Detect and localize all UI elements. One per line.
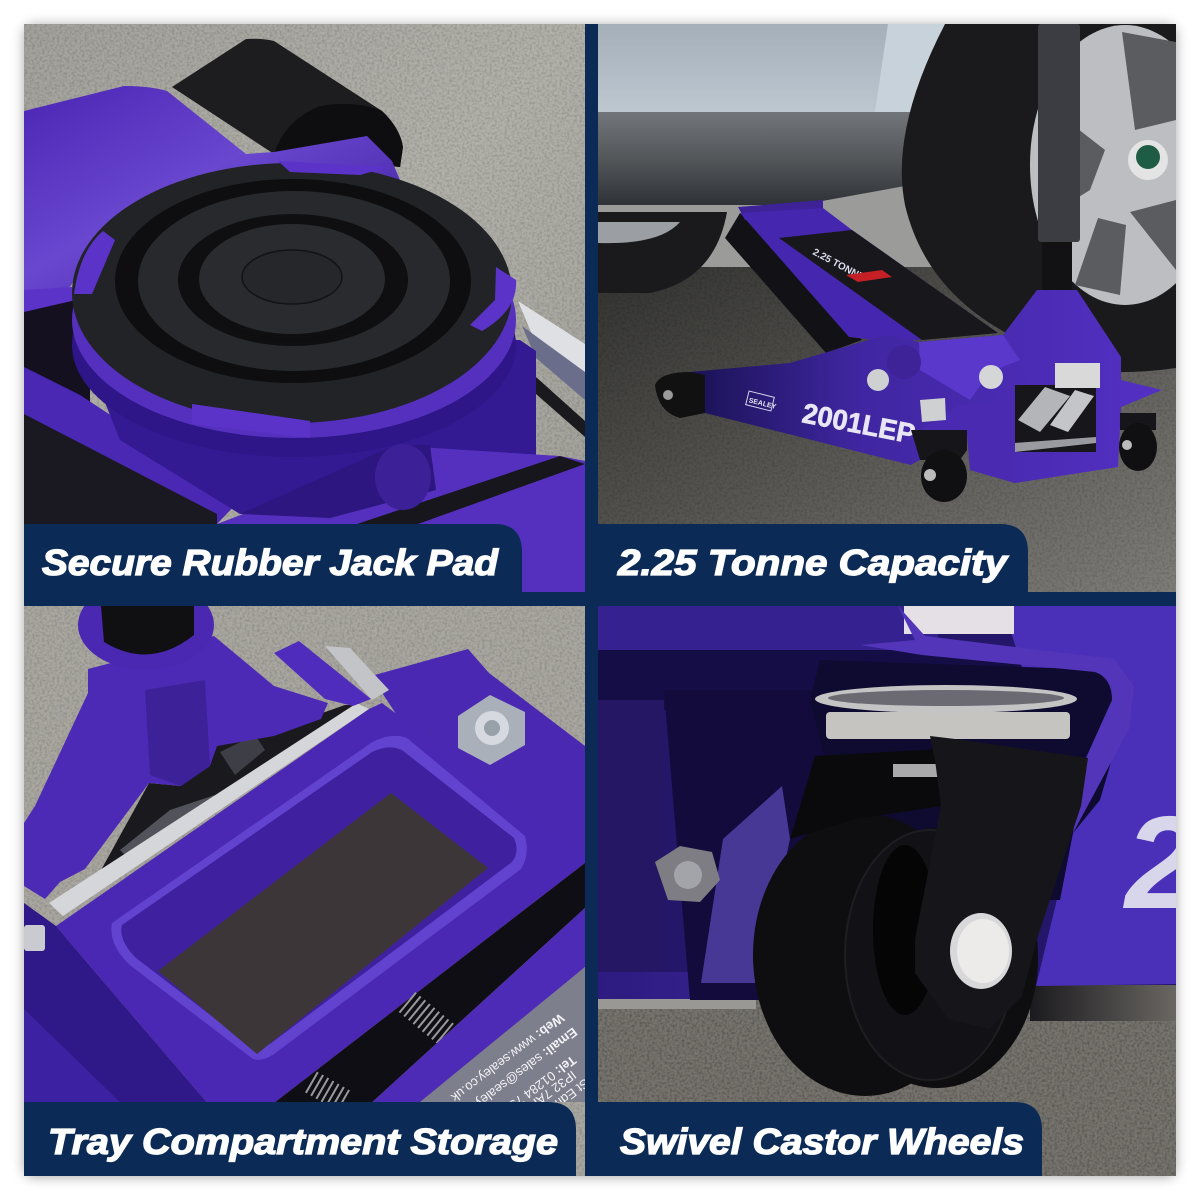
- pillar collar: [78, 606, 214, 664]
- label: secure rubber jack pad: [24, 524, 522, 592]
- icon: pillar: [24, 580, 328, 899]
- bright flange: [860, 606, 1134, 833]
- upper shell: [598, 606, 938, 650]
- chrome bolts behind flange: [325, 646, 389, 700]
- sealey badge: SEALEY: [748, 397, 777, 411]
- icon: front tyre and wheel: [902, 24, 1200, 372]
- panel: swivel castor wheels: [598, 606, 1198, 1176]
- icon: chrome bar: [49, 703, 369, 916]
- left shell: [598, 700, 664, 990]
- icon: black fork: [790, 749, 941, 839]
- label: swivel castor wheels: [585, 1102, 1042, 1176]
- mechanism cavity: [1015, 385, 1096, 452]
- sticker: IP32 7AR: [526, 1068, 579, 1113]
- right shell: [1003, 606, 1176, 986]
- jack brand lettering: 2001LEP: [800, 397, 918, 450]
- side frame: [690, 290, 1162, 483]
- shell underside: [810, 660, 1129, 900]
- label: swivel castor wheels: Swivel Castor Wheels: [620, 1121, 1024, 1162]
- purple rear body: [24, 86, 400, 295]
- icon: black roller: [172, 39, 403, 167]
- sticker: Email: sales@sealey.co.uk: [445, 1025, 580, 1132]
- icon: tray body: [24, 703, 585, 1106]
- icon: rear tyre: [598, 212, 727, 293]
- front left wheel: [655, 372, 705, 418]
- purple pad seat: [72, 332, 516, 457]
- panel: tray compartment storage: [24, 580, 592, 1176]
- panel: rubber jack pad: [24, 24, 585, 592]
- label: secure rubber jack pad: Secure Rubber Jack Pad: [42, 542, 499, 583]
- bolts: [867, 369, 889, 391]
- pivot: [887, 345, 921, 379]
- purple band: [368, 908, 585, 1106]
- wheel shadow: [1030, 985, 1176, 1021]
- icon: back plate: [371, 649, 585, 860]
- icon: shaft: [101, 606, 194, 654]
- sealey badge: [746, 391, 779, 412]
- label: capacity: 2.25 Tonne Capacity: [617, 542, 1009, 583]
- icon: jack handle: [1038, 24, 1080, 292]
- icon: magnetic mat: [158, 793, 488, 1054]
- label: tray compartment storage: Tray Compartment Storage: [48, 1121, 558, 1162]
- icon: trolley jack: 2.25 TONNE: [811, 247, 866, 284]
- panel: 2.25 tonne capacity: [598, 24, 1200, 592]
- black slit: [274, 863, 585, 1106]
- icon: chrome bar: [518, 301, 585, 437]
- label: tray compartment storage: [24, 1102, 576, 1176]
- label: capacity: [585, 524, 1028, 592]
- chrome cylinders: [1055, 363, 1100, 388]
- sticker: Tel: 01284 757: [501, 1053, 579, 1117]
- icon: rubber pad: [72, 161, 516, 438]
- icon: bolt head: [655, 846, 720, 902]
- icon: trolley jack: [655, 200, 1162, 502]
- icon: castor wheel: [753, 736, 1088, 1096]
- lower right plate: [217, 447, 585, 592]
- icon: hex nut: [458, 695, 525, 765]
- right pedestal: [80, 340, 536, 514]
- pad notches: [278, 161, 389, 175]
- ground: [598, 999, 1176, 1176]
- sticker: Web: www.sealey.co.uk: [448, 1011, 567, 1106]
- lower left body: [24, 300, 90, 402]
- caster wheels: [911, 430, 967, 460]
- icon: bearing: [815, 685, 1077, 739]
- icon: flange: [274, 641, 371, 706]
- sticker: [420, 967, 592, 1132]
- lettering on shell: 2: [1122, 789, 1198, 936]
- saddle arm underside: [725, 213, 862, 353]
- dividers: [585, 24, 598, 1176]
- caster plate: [906, 434, 1014, 483]
- icon: car body: [598, 24, 888, 112]
- instruction label: [779, 230, 998, 340]
- icon: springs: [407, 1002, 447, 1035]
- chrome washer: [24, 925, 45, 951]
- sticker: St Edm: [549, 1076, 592, 1113]
- hinge boss: [375, 444, 431, 510]
- mechanism: [102, 705, 362, 869]
- icon: silver axle cap: [950, 913, 1012, 989]
